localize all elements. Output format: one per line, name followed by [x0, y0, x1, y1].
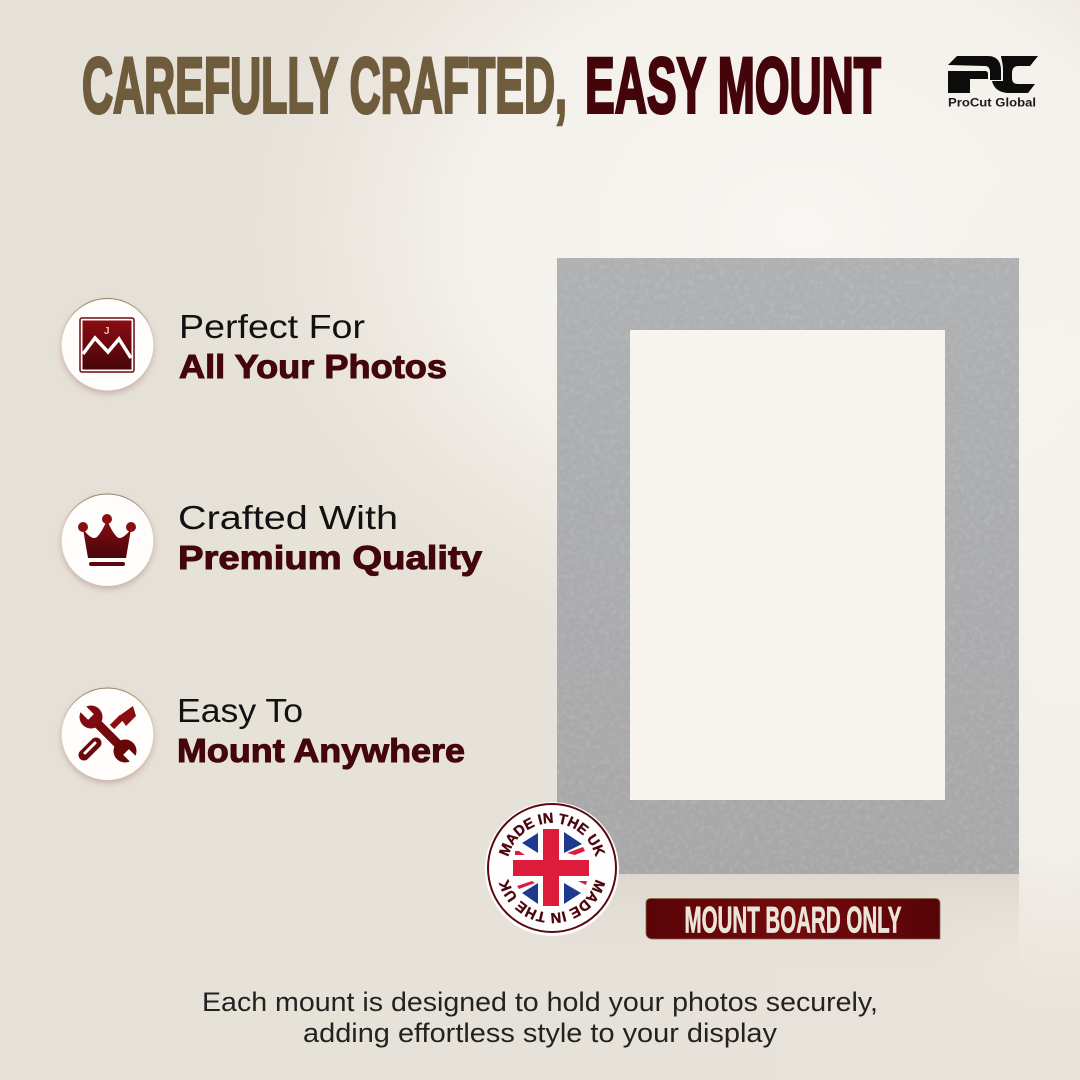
caption — [202, 987, 878, 1048]
feature 2: Crafted With Premium Quality: Premium Quality — [178, 539, 483, 576]
title: CAREFULLY CRAFTED, — [82, 40, 567, 130]
icon: photo: J — [104, 326, 110, 337]
caption: adding effortless style to your display — [303, 1018, 778, 1048]
caption: Each mount is designed to hold your photos securely, — [202, 987, 878, 1017]
badge: made in the UK: MADE IN THE UK — [498, 878, 606, 924]
feature 3: Easy To Mount Anywhere — [62, 688, 465, 780]
icon: crown — [62, 494, 154, 586]
feature 1: Perfect For All Your Photos: All Your Photos — [179, 348, 447, 385]
label: mount board only — [646, 898, 940, 940]
icon: union flag — [513, 829, 589, 906]
badge: made in the UK — [485, 802, 619, 936]
feature 3: Easy To Mount Anywhere: Mount Anywhere — [177, 732, 465, 769]
mount board reflection — [557, 874, 1019, 984]
badge text: MADE IN THE UK — [498, 812, 606, 858]
logo: ProCut Global — [948, 56, 1038, 110]
text: feature 1: Perfect For — [179, 308, 365, 345]
feature 2: Crafted With Premium Quality — [62, 494, 483, 586]
icon: photo — [62, 298, 154, 390]
text: feature 3: Easy To — [177, 692, 303, 729]
label: mount board only: MOUNT BOARD ONLY — [684, 900, 902, 940]
feature 1: Perfect For All Your Photos — [62, 298, 447, 390]
text: feature 2: Crafted With — [178, 499, 398, 536]
mount window — [630, 330, 945, 800]
logo: ProCut Global: ProCut Global — [948, 96, 1036, 110]
mount board: grey frame with window — [557, 258, 1019, 874]
icon: wrench and screwdriver — [62, 688, 154, 780]
